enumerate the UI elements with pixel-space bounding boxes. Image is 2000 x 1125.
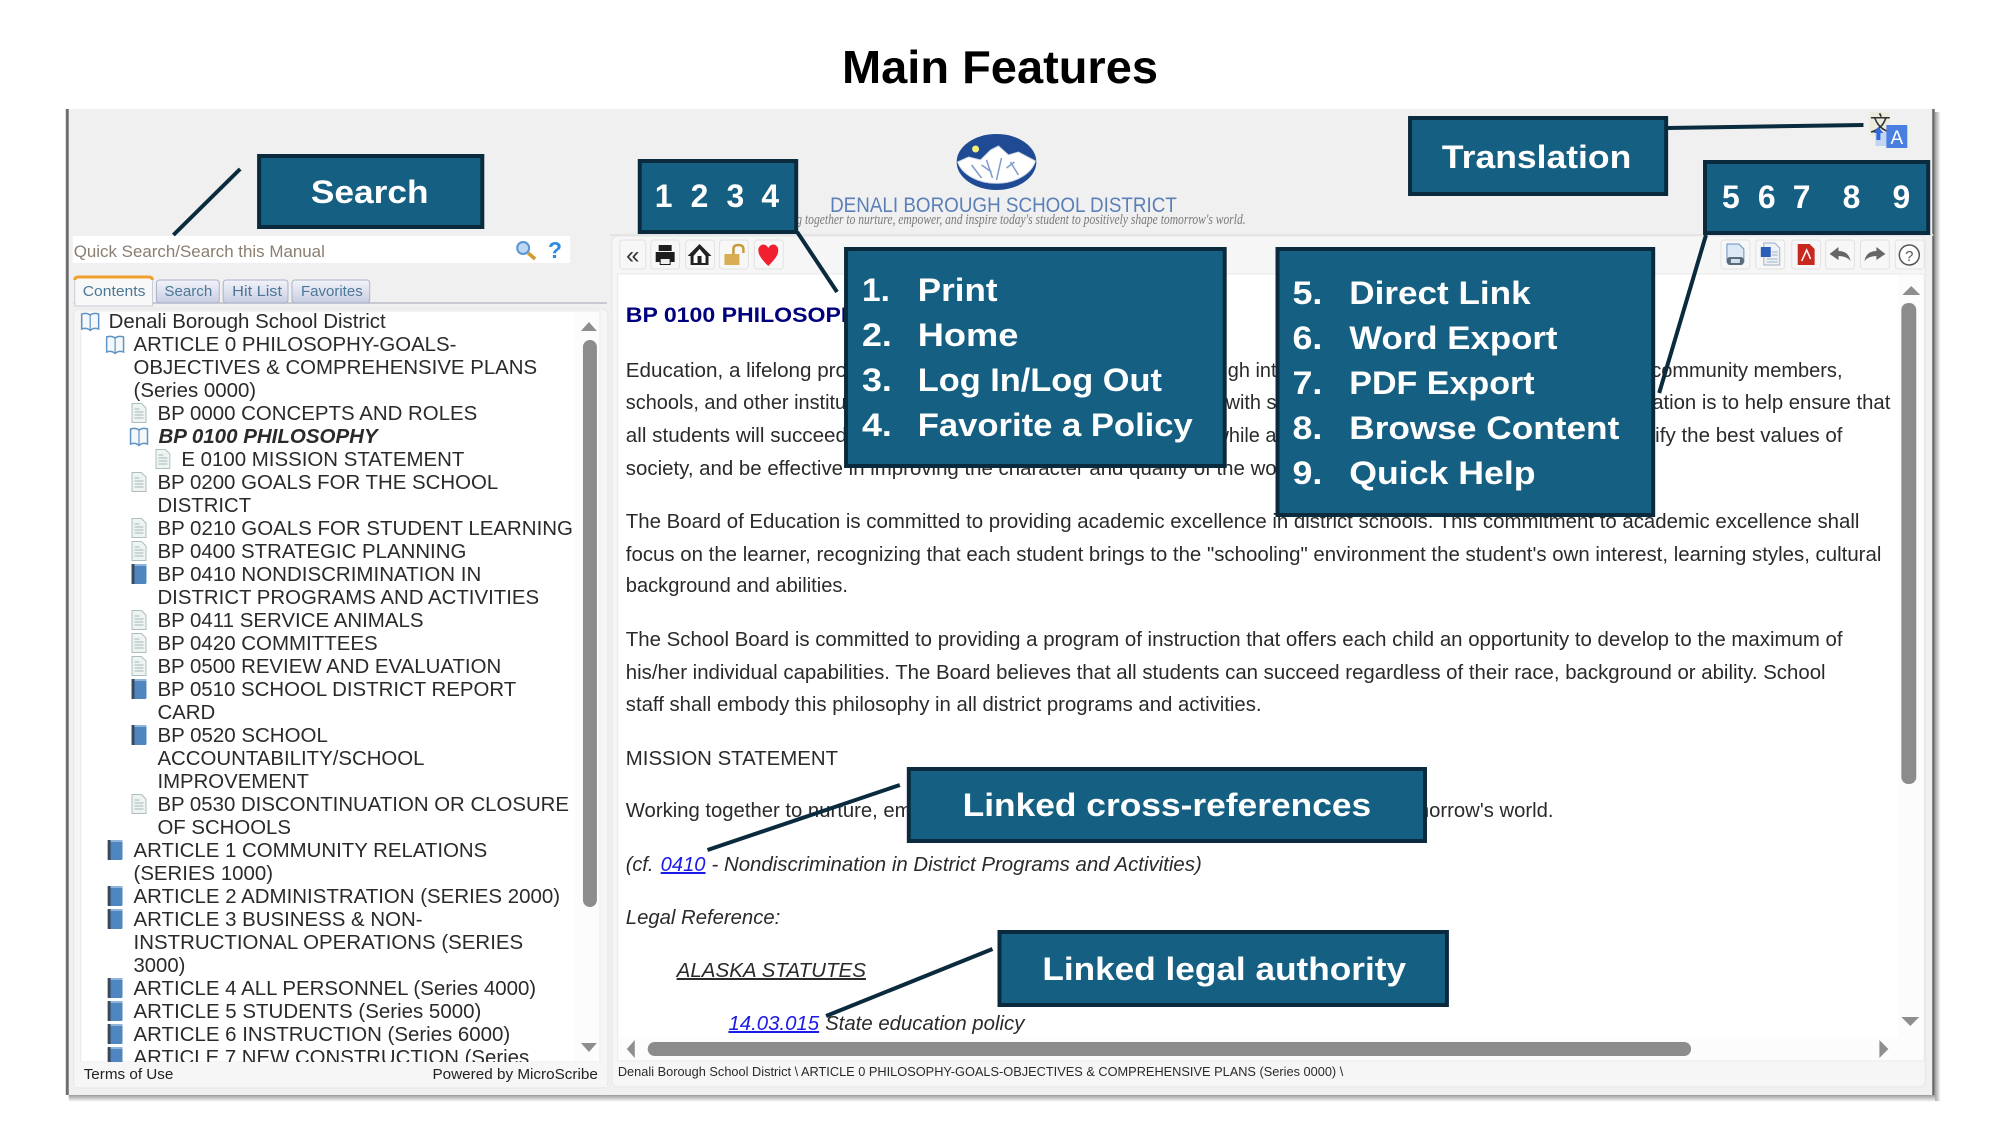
callout: icon numbers 1-4: 3 [727, 178, 744, 214]
tree: BP 0210: BP 0210 GOALS FOR STUDENT LEARNING [157, 518, 573, 540]
tree: Article 6: ARTICLE 6 INSTRUCTION (Series 6000) [134, 1024, 510, 1046]
tabs: Search [164, 283, 212, 300]
header logo: DENALI BOROUGH SCHOOL DISTRICT [830, 194, 1177, 217]
icon: translation: 文 [1870, 113, 1891, 136]
callout: toolbar list 5-9 [1278, 249, 1653, 515]
icon: word export [1756, 240, 1785, 269]
quick search bar: Quick Search/Search this Manual [74, 242, 325, 261]
paragraph 3: staff shall embody this philosophy in all district programs and activities. [626, 694, 1262, 716]
mission statement [626, 748, 1554, 822]
paragraph 1: society, and be effective in improving the character and quality of the wor [626, 458, 1284, 480]
tree: BP 0520: IMPROVEMENT [157, 771, 309, 793]
icon: pdf export [1792, 240, 1821, 269]
callout: icon numbers 5-9: 7 [1793, 179, 1811, 215]
tree: BP 0411: BP 0411 SERVICE ANIMALS [157, 610, 424, 632]
callout: Search [173, 156, 482, 235]
paragraph 2: The Board of Education is committed to providing academic excellence in district schools. This commitment to academic excellence shall [626, 511, 1859, 533]
contents tree [82, 311, 573, 1069]
tree: Article 7: ARTICLE 7 NEW CONSTRUCTION (Series [134, 1047, 529, 1069]
callout: Search: Search [311, 174, 428, 210]
icon: direct link [1721, 240, 1750, 269]
tree: BP 0410: BP 0410 NONDISCRIMINATION IN [157, 564, 481, 586]
toolbar left icons [620, 240, 783, 269]
callout: icon numbers 5-9: 5 [1722, 179, 1740, 215]
tree: E 0100: E 0100 MISSION STATEMENT [181, 449, 464, 471]
paragraph 1: ation is to help ensure that [1652, 392, 1891, 414]
tree: Article 0: ARTICLE 0 PHILOSOPHY-GOALS- [134, 334, 456, 356]
legal reference: State education policy [825, 1013, 1025, 1035]
tree: Denali Borough School District: Denali Borough School District [109, 311, 386, 333]
document heading: BP 0100 PHILOSOPHY [626, 304, 873, 327]
tree: BP 0520 [132, 725, 425, 793]
quick search bar: ? [548, 237, 562, 263]
callout: toolbar list 1-4: Print [918, 272, 998, 308]
callout: toolbar list 1-4: 1. [862, 272, 890, 308]
left sidebar panel [73, 236, 608, 1088]
icon: home [686, 240, 714, 269]
legal reference [626, 907, 1025, 1035]
tree: BP 0510: CARD [157, 702, 215, 724]
tree: Article 1: ARTICLE 1 COMMUNITY RELATIONS [134, 840, 487, 862]
tree: Article 0: (Series 0000) [134, 380, 256, 402]
tree: Article 3: 3000) [134, 955, 185, 977]
tree: Article 1: (SERIES 1000) [134, 863, 273, 885]
mission statement: Working together to nurture, empower, and inspire today's student to positively shape tomorrow's world. [626, 800, 1554, 822]
paragraph 1: schools, and other institu [626, 392, 846, 414]
tree: BP 0500: BP 0500 REVIEW AND EVALUATION [157, 656, 501, 678]
tree: Article 3: INSTRUCTIONAL OPERATIONS (SERIES [134, 932, 523, 954]
callout: Linked legal authority [826, 932, 1447, 1016]
tree: BP 0420: BP 0420 COMMITTEES [157, 633, 378, 655]
callout: toolbar list 5-9: 6. [1292, 320, 1322, 356]
tree: BP 0530 [132, 794, 569, 839]
tree: Article 1 [108, 840, 487, 885]
callout: icon numbers 5-9: 9 [1892, 179, 1910, 215]
callout: toolbar list 5-9: 7. [1292, 365, 1322, 401]
paragraph 3: The School Board is committed to providing a program of instruction that offers each child an opportunity to develop to the maximum of [626, 629, 1843, 651]
sidebar footer: Terms of Use [84, 1066, 173, 1083]
callout: toolbar list 1-4: 2. [862, 317, 892, 353]
tabs: Contents [83, 283, 145, 300]
paragraph 2: background and abilities. [626, 575, 848, 597]
callout: icon numbers 5-9 [1659, 162, 1928, 393]
tree: BP 0510 [132, 679, 516, 724]
legal reference: Legal Reference: [626, 907, 780, 929]
paragraph 3: his/her individual capabilities. The Board believes that all students can succeed regardless of their race, background or ability. School [626, 662, 1826, 684]
tree: BP 0530: BP 0530 DISCONTINUATION OR CLOSURE [157, 794, 569, 816]
toolbar right icons [1721, 240, 1924, 269]
icon: back [1826, 240, 1854, 269]
paragraph 1: Education, a lifelong pro [626, 360, 847, 382]
icon: quick help: ? [1905, 248, 1913, 265]
paragraph 1 [626, 360, 1891, 480]
tree: Article 4: ARTICLE 4 ALL PERSONNEL (Series 4000) [134, 978, 536, 1000]
tree: BP 0410 [132, 564, 539, 609]
callout: toolbar list 5-9: Word Export [1349, 320, 1558, 356]
tree: Article 0: OBJECTIVES & COMPREHENSIVE PLANS [134, 357, 537, 379]
quick search bar [73, 236, 570, 263]
icon: heart [754, 240, 783, 269]
legal reference: ALASKA STATUTES [676, 960, 867, 982]
callout: icon numbers 1-4: 1 [655, 178, 673, 214]
callout: toolbar list 5-9: 8. [1292, 410, 1322, 446]
document text [626, 304, 1891, 1035]
paragraph 1: while a [1214, 425, 1277, 447]
callout: toolbar list 1-4 [846, 249, 1225, 466]
icon: translation [1869, 112, 1907, 149]
callout: icon numbers 5-9: 6 [1758, 179, 1776, 215]
callout: Linked cross-references: Linked cross-references [963, 787, 1371, 823]
cross-reference line: 0410 [661, 854, 706, 876]
header logo [763, 134, 1246, 228]
icon: print [651, 240, 680, 269]
tabs [74, 277, 607, 306]
callout: icon numbers 1-4: 4 [761, 178, 779, 214]
tree: BP 0200: DISTRICT [157, 495, 251, 517]
paragraph 1: ify the best values of [1655, 425, 1843, 447]
tree: BP 0400: BP 0400 STRATEGIC PLANNING [157, 541, 466, 563]
tree: BP 0520: BP 0520 SCHOOL [157, 725, 328, 747]
tree: BP 0200: BP 0200 GOALS FOR THE SCHOOL [157, 472, 498, 494]
callout: icon numbers 5-9: 8 [1843, 179, 1860, 215]
callout: Linked cross-references [708, 769, 1425, 850]
paragraph 1: community members, [1651, 360, 1843, 382]
tree: BP 0410: DISTRICT PROGRAMS AND ACTIVITIES [157, 587, 539, 609]
mission statement: MISSION STATEMENT [626, 748, 838, 770]
callout: icon numbers 1-4 [640, 161, 837, 292]
callout: toolbar list 5-9: PDF Export [1349, 365, 1535, 401]
callout: toolbar list 5-9: Browse Content [1349, 410, 1620, 446]
callout: toolbar list 1-4: 3. [862, 362, 892, 398]
tree: Article 2: ARTICLE 2 ADMINISTRATION (SERIES 2000) [134, 886, 560, 908]
callout: toolbar list 5-9: Direct Link [1349, 275, 1531, 311]
icon: translation: A [1891, 128, 1903, 149]
sidebar footer: Powered by MicroScribe [432, 1066, 598, 1083]
main document panel [610, 235, 1933, 1087]
callout: toolbar list 1-4: Home [918, 317, 1018, 353]
legal reference: 14.03.015 [728, 1013, 820, 1035]
icon: lock [719, 240, 748, 269]
paragraph 2 [626, 511, 1881, 597]
tree: Article 0 [107, 334, 537, 402]
callout: toolbar list 5-9: 5. [1292, 275, 1322, 311]
paragraph 1: with s [1225, 392, 1277, 414]
cross-reference line: (cf. [626, 854, 653, 876]
tree: BP 0530: OF SCHOOLS [157, 817, 291, 839]
callout: toolbar list 1-4: Favorite a Policy [918, 407, 1193, 443]
icon: collapse: « [626, 242, 639, 269]
callout: Translation: Translation [1442, 139, 1631, 175]
tree: Article 5: ARTICLE 5 STUDENTS (Series 5000) [134, 1001, 481, 1023]
paragraph 1: all students will succeed [626, 425, 847, 447]
callout: toolbar list 1-4: Log In/Log Out [918, 362, 1162, 398]
breadcrumb: Denali Borough School District \ ARTICLE 0 PHILOSOPHY-GOALS-OBJECTIVES & COMPREHENSIVE PLANS (Series 0000) \ [618, 1064, 1344, 1079]
callout: toolbar list 1-4: 4. [862, 407, 892, 443]
tree: BP 0510: BP 0510 SCHOOL DISTRICT REPORT [157, 679, 516, 701]
tree: Article 3: ARTICLE 3 BUSINESS & NON- [134, 909, 423, 931]
tabs: Favorites [301, 283, 363, 300]
sidebar footer [84, 1066, 598, 1083]
callout: icon numbers 1-4: 2 [691, 178, 708, 214]
header logo: Working together to nurture, empower, and inspire today's student to positively shape tomorrow's world. [763, 212, 1246, 228]
icon: forward [1860, 240, 1889, 269]
icon: collapse [620, 240, 646, 269]
paragraph 2: focus on the learner, recognizing that each student brings to the "schooling" environment the student's own interest, learning styles, cultural [626, 544, 1881, 566]
tree scrollbar [581, 322, 597, 1052]
icon: quick help [1895, 240, 1924, 269]
callout: toolbar list 5-9: Quick Help [1349, 455, 1536, 491]
paragraph 3 [626, 629, 1843, 716]
title: Main Features [842, 41, 1158, 93]
callout: Linked legal authority: Linked legal authority [1042, 951, 1406, 987]
tabs: Hit List [232, 283, 283, 300]
tree: BP 0200 [132, 472, 498, 517]
tree: BP 0520: ACCOUNTABILITY/SCHOOL [157, 748, 425, 770]
tree: BP 0100 selected: BP 0100 PHILOSOPHY [158, 426, 379, 448]
cross-reference line: - Nondiscrimination in District Programs and Activities) [712, 854, 1202, 876]
callout: Translation [1410, 118, 1863, 194]
tree: BP 0000: BP 0000 CONCEPTS AND ROLES [157, 403, 477, 425]
paragraph 1: ugh int [1217, 360, 1277, 382]
callout: toolbar list 5-9: 9. [1292, 455, 1322, 491]
document scrollbars [627, 286, 1920, 1058]
tree: Article 3 [108, 909, 523, 977]
